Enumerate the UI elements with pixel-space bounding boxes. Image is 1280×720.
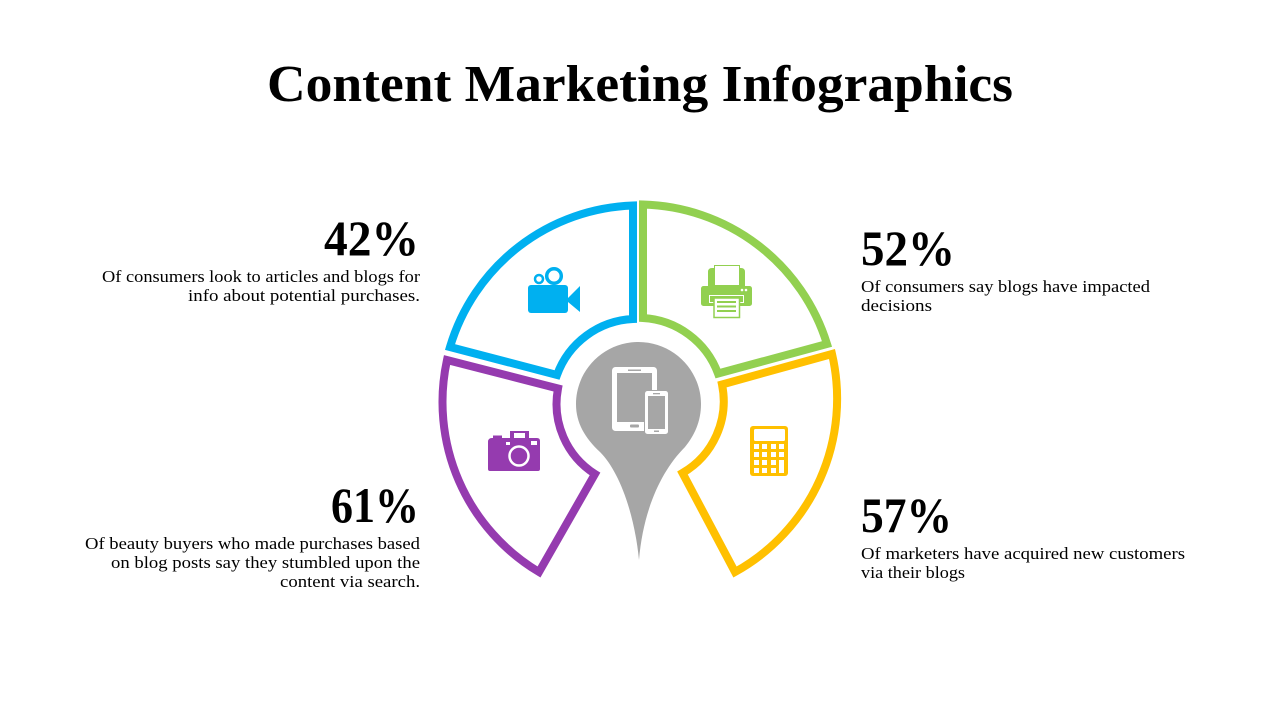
stat: 52%: 52%	[861, 220, 955, 276]
stat: 42%: 42%	[324, 210, 419, 266]
segment: purple	[442, 360, 595, 572]
description: 52%: decisions	[861, 296, 932, 315]
icon: video camera	[528, 269, 580, 313]
title: Content Marketing Infographics	[267, 56, 1013, 113]
segment: green	[643, 204, 827, 374]
panel: 57% text block	[861, 487, 1185, 582]
description: 52%	[861, 277, 1151, 315]
description: 57%: via their blogs	[861, 563, 965, 582]
segment: yellow	[682, 354, 837, 572]
panel: 52% text block	[861, 220, 1151, 315]
icon: calculator	[750, 426, 788, 476]
icon: printer	[701, 266, 752, 318]
description: 61%: on blog posts say they stumbled upon the	[111, 553, 420, 572]
description: 52%: Of consumers say blogs have impacted	[861, 277, 1151, 296]
description: 42%: info about potential purchases.	[188, 286, 420, 305]
panel: 61% text block	[85, 477, 421, 591]
icon: tablet and phone	[612, 367, 669, 435]
description: 57%	[861, 544, 1185, 582]
description: 61%: Of beauty buyers who made purchases based	[85, 534, 421, 553]
icon: camera	[488, 431, 540, 471]
stat: 57%: 57%	[861, 487, 952, 543]
panel: 42% text block	[102, 210, 420, 305]
stat: 61%: 61%	[331, 477, 419, 533]
description: 42%: Of consumers look to articles and blogs for	[102, 267, 420, 286]
description: 61%	[85, 534, 421, 591]
description: 61%: content via search.	[280, 572, 420, 591]
description: 57%: Of marketers have acquired new customers	[861, 544, 1185, 563]
description: 42%	[102, 267, 420, 305]
segment: blue	[450, 206, 633, 375]
center: grey map pin	[576, 342, 701, 560]
